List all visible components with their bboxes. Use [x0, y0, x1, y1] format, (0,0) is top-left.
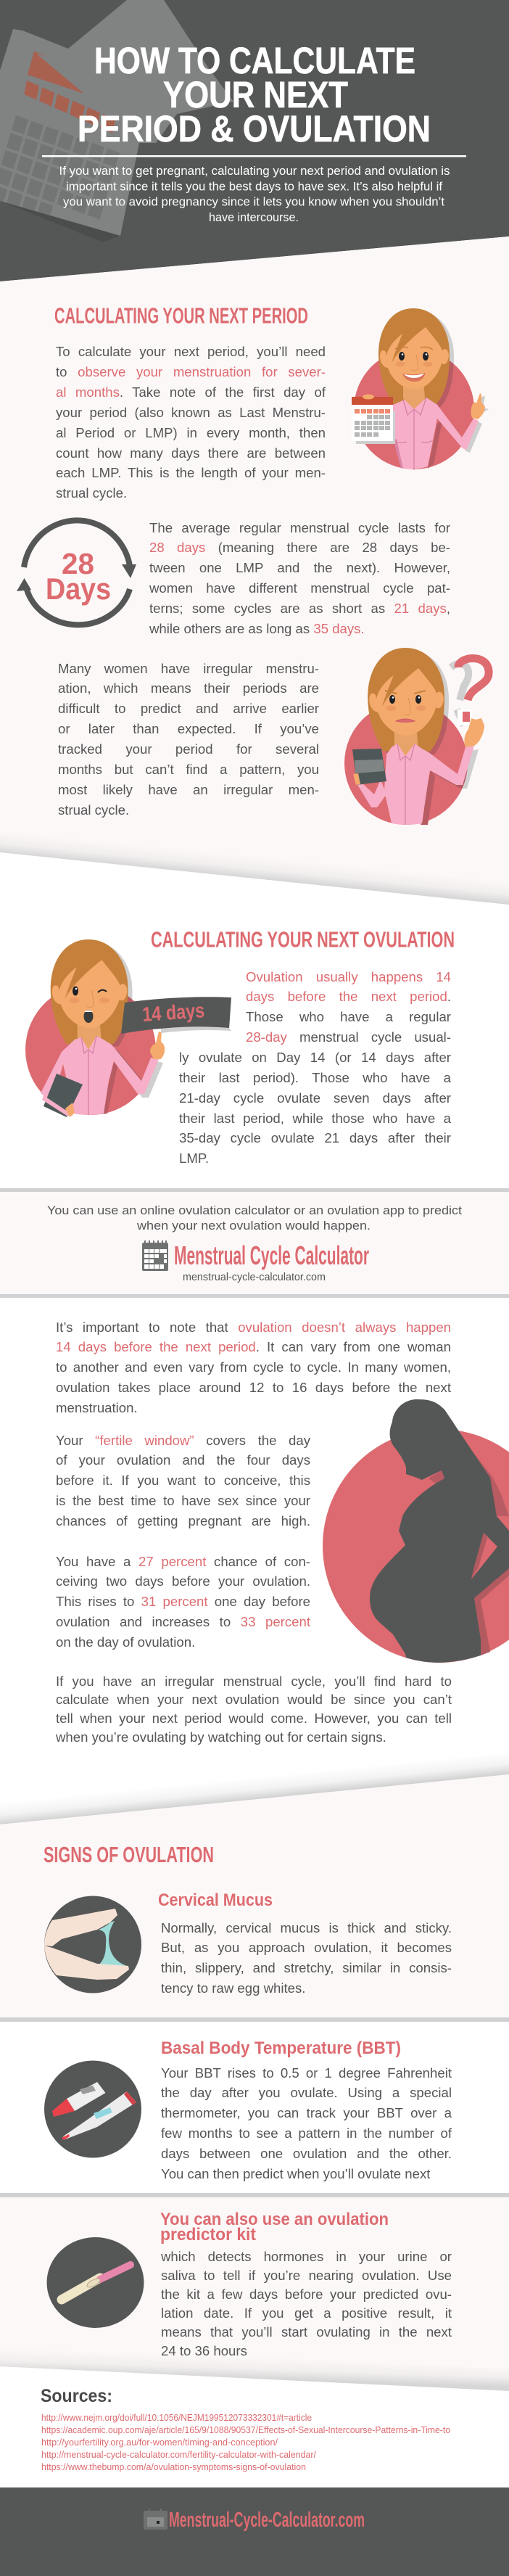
- intro text: important since it tells you the best days to have sex. It’s also helpful if: [66, 179, 442, 193]
- icon: ovulation test stick: [46, 2237, 144, 2328]
- text: observe your menstruation: al months. Take note of the first day of: [56, 384, 326, 400]
- text: observe your menstruation: each LMP. This is the length of your men-: [56, 465, 326, 480]
- text: irregular cycle note: when you’re ovulating by watching out for certain signs.: [56, 1729, 386, 1745]
- text: conception chances: [56, 1554, 310, 1650]
- text: irregular menstruation: strual cycle.: [58, 802, 129, 817]
- text: basal body temperature: Your BBT rises to 0.5 or 1 degree Fahrenheit: [161, 2065, 452, 2081]
- text: ovulation timing: their last period, while those who have a: [179, 1110, 451, 1126]
- icon: cervical mucus between fingers: [44, 1896, 141, 1993]
- text: predictor kit: saliva to tell if you’re nearing ovulation. Use: [161, 2268, 452, 2283]
- text: observe your menstruation: al Period or LMP) in every month, then: [56, 425, 326, 440]
- text: irregular cycle note: If you have an irregular menstrual cycle, you’ll find hard to: [56, 1674, 452, 1689]
- heading: predictor kit: predictor kit: [160, 2225, 256, 2244]
- text: irregular cycle note: tell when your next period would come. However, you can tell: [56, 1711, 452, 1726]
- text: conception chances: ovulation and increases to 33 percent: [56, 1614, 310, 1629]
- source links: https://academic.oup.com/aje/article/165/9/1088/90537/Effects-of-Sexual-Intercourse-Patterns-in-Time-to: [41, 2424, 450, 2435]
- panel: online calculator: when your next ovulation would happen.: [136, 1219, 371, 1233]
- text: ovulation varies: to another and even vary from cycle to cycle. In many women,: [56, 1359, 451, 1375]
- text: ovulation timing: 35-day cycle ovulate 21 days after their: [179, 1130, 451, 1145]
- source links: https://www.thebump.com/a/ovulation-symptoms-signs-of-ovulation: [41, 2461, 306, 2472]
- text: conception chances: on the day of ovulation.: [56, 1634, 195, 1650]
- text: average cycle length: The average regular menstrual cycle lasts for: [149, 520, 450, 535]
- panel: online calculator: You can use an online ovulation calculator or an ovulation app to predict: [47, 1203, 462, 1217]
- text: predictor kit: [161, 2249, 452, 2358]
- source links: http://yourfertility.org.au/for-women/timing-and-conception/: [41, 2437, 278, 2448]
- logo: menstrual cycle calculator: [142, 1240, 369, 1283]
- text: cervical mucus: thin, slippery, and stretchy, similar in consis-: [161, 1960, 452, 1975]
- text: ovulation timing: 21-day cycle ovulate seven days after: [179, 1090, 451, 1106]
- heading: calculating your next period: CALCULATING YOUR NEXT PERIOD: [54, 303, 308, 329]
- source links: [41, 2412, 450, 2472]
- text: fertile window: chances of getting pregnant are high.: [56, 1513, 310, 1528]
- text: average cycle length: while others are as long as 35 days.: [149, 621, 365, 636]
- text: irregular menstruation: Many women have irregular menstru-: [58, 661, 319, 676]
- text: ovulation varies: 14 days before the next period. It can vary from one woman: [56, 1339, 451, 1354]
- text: observe your menstruation: your period (also known as Last Menstru-: [56, 405, 326, 420]
- text: fertile window: is the best time to have sex since your: [56, 1493, 310, 1508]
- text: conception chances: ceiving two days before your ovulation.: [56, 1573, 310, 1589]
- icon: thermometers: [44, 2060, 141, 2157]
- heading: predictor kit: [160, 2210, 389, 2244]
- intro text: If you want to get pregnant, calculating your next period and ovulation is: [59, 164, 450, 178]
- footer: Menstrual-Cycle-Calculator.com: [169, 2509, 365, 2532]
- text: ovulation varies: ovulation takes place around 12 to 16 days before the next: [56, 1380, 451, 1395]
- title: PERIOD & OVULATION: [78, 108, 431, 149]
- illustration: winking woman with 14 days banner: [25, 939, 231, 1117]
- text: average cycle length: 28 days (meaning there are 28 days be-: [149, 540, 450, 555]
- illustration: woman with calendar: [352, 308, 489, 470]
- text: ovulation timing: LMP.: [179, 1151, 209, 1166]
- text: cervical mucus: [161, 1920, 452, 1996]
- text: predictor kit: which detects hormones in your urine or: [161, 2249, 452, 2264]
- illustration: pregnant silhouette: [323, 1399, 509, 1663]
- text: cervical mucus: Normally, cervical mucus is thick and sticky.: [161, 1920, 452, 1935]
- text: observe your menstruation: count how many days there are between: [56, 445, 326, 461]
- title: [78, 40, 431, 149]
- title: HOW TO CALCULATE: [94, 40, 415, 81]
- text: predictor kit: means that you’ll start ovulating in the next: [161, 2324, 452, 2340]
- panel: predictor kit: [0, 2193, 509, 2391]
- text: conception chances: This rises to 31 percent one day before: [56, 1594, 310, 1609]
- text: predictor kit: 24 to 36 hours: [161, 2343, 247, 2358]
- header background: [0, 0, 509, 281]
- text: ovulation timing: their last period). Those who have a: [179, 1070, 451, 1085]
- text: basal body temperature: [161, 2065, 452, 2181]
- text: cervical mucus: But, as you approach ovulation, it becomes: [161, 1940, 452, 1955]
- icon: 28 days cycle: [17, 520, 136, 625]
- icon: header calendar: [0, 0, 233, 242]
- intro text: [59, 164, 450, 224]
- icon: 28 days cycle: 28: [62, 547, 94, 580]
- text: fertile window: of your ovulation and the four days: [56, 1452, 310, 1468]
- text: irregular menstruation: most likely have an irregular men-: [58, 782, 319, 797]
- text: irregular menstruation: months but can’t find a pattern, you: [58, 762, 319, 777]
- heading: basal body temperature: Basal Body Temperature (BBT): [161, 2038, 401, 2058]
- text: average cycle length: [149, 520, 450, 636]
- text: ovulation timing: [179, 969, 451, 1166]
- text: basal body temperature: days between one ovulation and the other.: [161, 2146, 452, 2161]
- illustration: confused woman with question mark: [344, 648, 489, 825]
- panel: online calculator: [0, 1188, 509, 1298]
- text: average cycle length: women have different menstrual cycle pat-: [149, 580, 450, 596]
- text: fertile window: [56, 1433, 310, 1528]
- heading: sources: Sources:: [41, 2386, 112, 2406]
- text: ovulation timing: Those who have a regular: [246, 1009, 451, 1024]
- text: fertile window: before it. If you want to conceive, this: [56, 1473, 310, 1488]
- heading: predictor kit: You can also use an ovulation: [160, 2210, 389, 2229]
- source links: http://menstrual-cycle-calculator.com/fertility-calculator-with-calendar/: [41, 2449, 316, 2460]
- text: observe your menstruation: strual cycle.: [56, 485, 127, 501]
- text: irregular menstruation: tracked your period for several: [58, 741, 319, 757]
- text: ovulation varies: It’s important to note that ovulation doesn’t always happen: [56, 1320, 451, 1335]
- text: ovulation varies: [56, 1320, 451, 1415]
- text: irregular menstruation: or later than expected. If you’ve: [58, 721, 319, 736]
- heading: signs of ovulation: SIGNS OF OVULATION: [44, 1842, 214, 1867]
- logo: menstrual cycle calculator: menstrual-cycle-calculator.com: [183, 1271, 326, 1283]
- text: basal body temperature: the day after you ovulate. Using a special: [161, 2085, 452, 2100]
- text: irregular menstruation: [58, 661, 319, 818]
- text: predictor kit: the kit a few days before your predicted ovu-: [161, 2287, 452, 2302]
- text: ovulation varies: menstruation.: [56, 1400, 138, 1415]
- text: ovulation timing: days before the next period.: [246, 989, 451, 1004]
- text: ovulation timing: ly ovulate on Day 14 (or 14 days after: [179, 1050, 451, 1065]
- text: fertile window: Your “fertile window” covers the day: [56, 1433, 310, 1448]
- heading: cervical mucus: Cervical Mucus: [158, 1890, 273, 1910]
- text: conception chances: You have a 27 percent chance of con-: [56, 1554, 310, 1569]
- text: basal body temperature: You can then predict when you’ll ovulate next: [161, 2166, 430, 2181]
- source links: http://www.nejm.org/doi/full/10.1056/NEJM199512073332301#t=article: [41, 2412, 312, 2423]
- text: irregular menstruation: ation, which means their periods are: [58, 680, 319, 696]
- text: observe your menstruation: to observe your menstruation for sever-: [56, 364, 326, 379]
- text: observe your menstruation: To calculate your next period, you’ll need: [56, 344, 326, 359]
- text: average cycle length: terns; some cycles are as short as 21 days,: [149, 601, 450, 616]
- text: irregular cycle note: calculate when your next ovulation would be since you can’t: [56, 1692, 452, 1707]
- text: irregular menstruation: difficult to predict and arrive earlier: [58, 701, 319, 716]
- logo: menstrual cycle calculator: Menstrual Cycle Calculator: [174, 1240, 369, 1270]
- text: predictor kit: lation date. If you get a positive result, it: [161, 2305, 452, 2321]
- text: ovulation timing: Ovulation usually happens 14: [246, 969, 451, 984]
- title: YOUR NEXT: [163, 74, 348, 115]
- text: basal body temperature: few months to see a pattern in the number of: [161, 2126, 452, 2141]
- intro text: you want to avoid pregnancy since it lets you know when you shouldn’t: [63, 195, 444, 209]
- text: average cycle length: tween one LMP and the next). However,: [149, 560, 450, 575]
- section background: next period: [0, 236, 509, 905]
- intro text: have intercourse.: [209, 210, 299, 224]
- footer: [0, 2487, 509, 2576]
- text: ovulation timing: 28-day menstrual cycle usual-: [246, 1029, 451, 1045]
- text: cervical mucus: tency to raw egg whites.: [161, 1980, 305, 1996]
- text: observe your menstruation: [56, 344, 326, 501]
- text: irregular cycle note: [56, 1674, 452, 1745]
- section background: signs of ovulation: [0, 1753, 509, 2022]
- illustration: winking woman with 14 days banner: 14 days: [141, 999, 205, 1026]
- text: basal body temperature: thermometer, you can track your BBT over a: [161, 2105, 452, 2120]
- icon: 28 days cycle: Days: [46, 572, 111, 606]
